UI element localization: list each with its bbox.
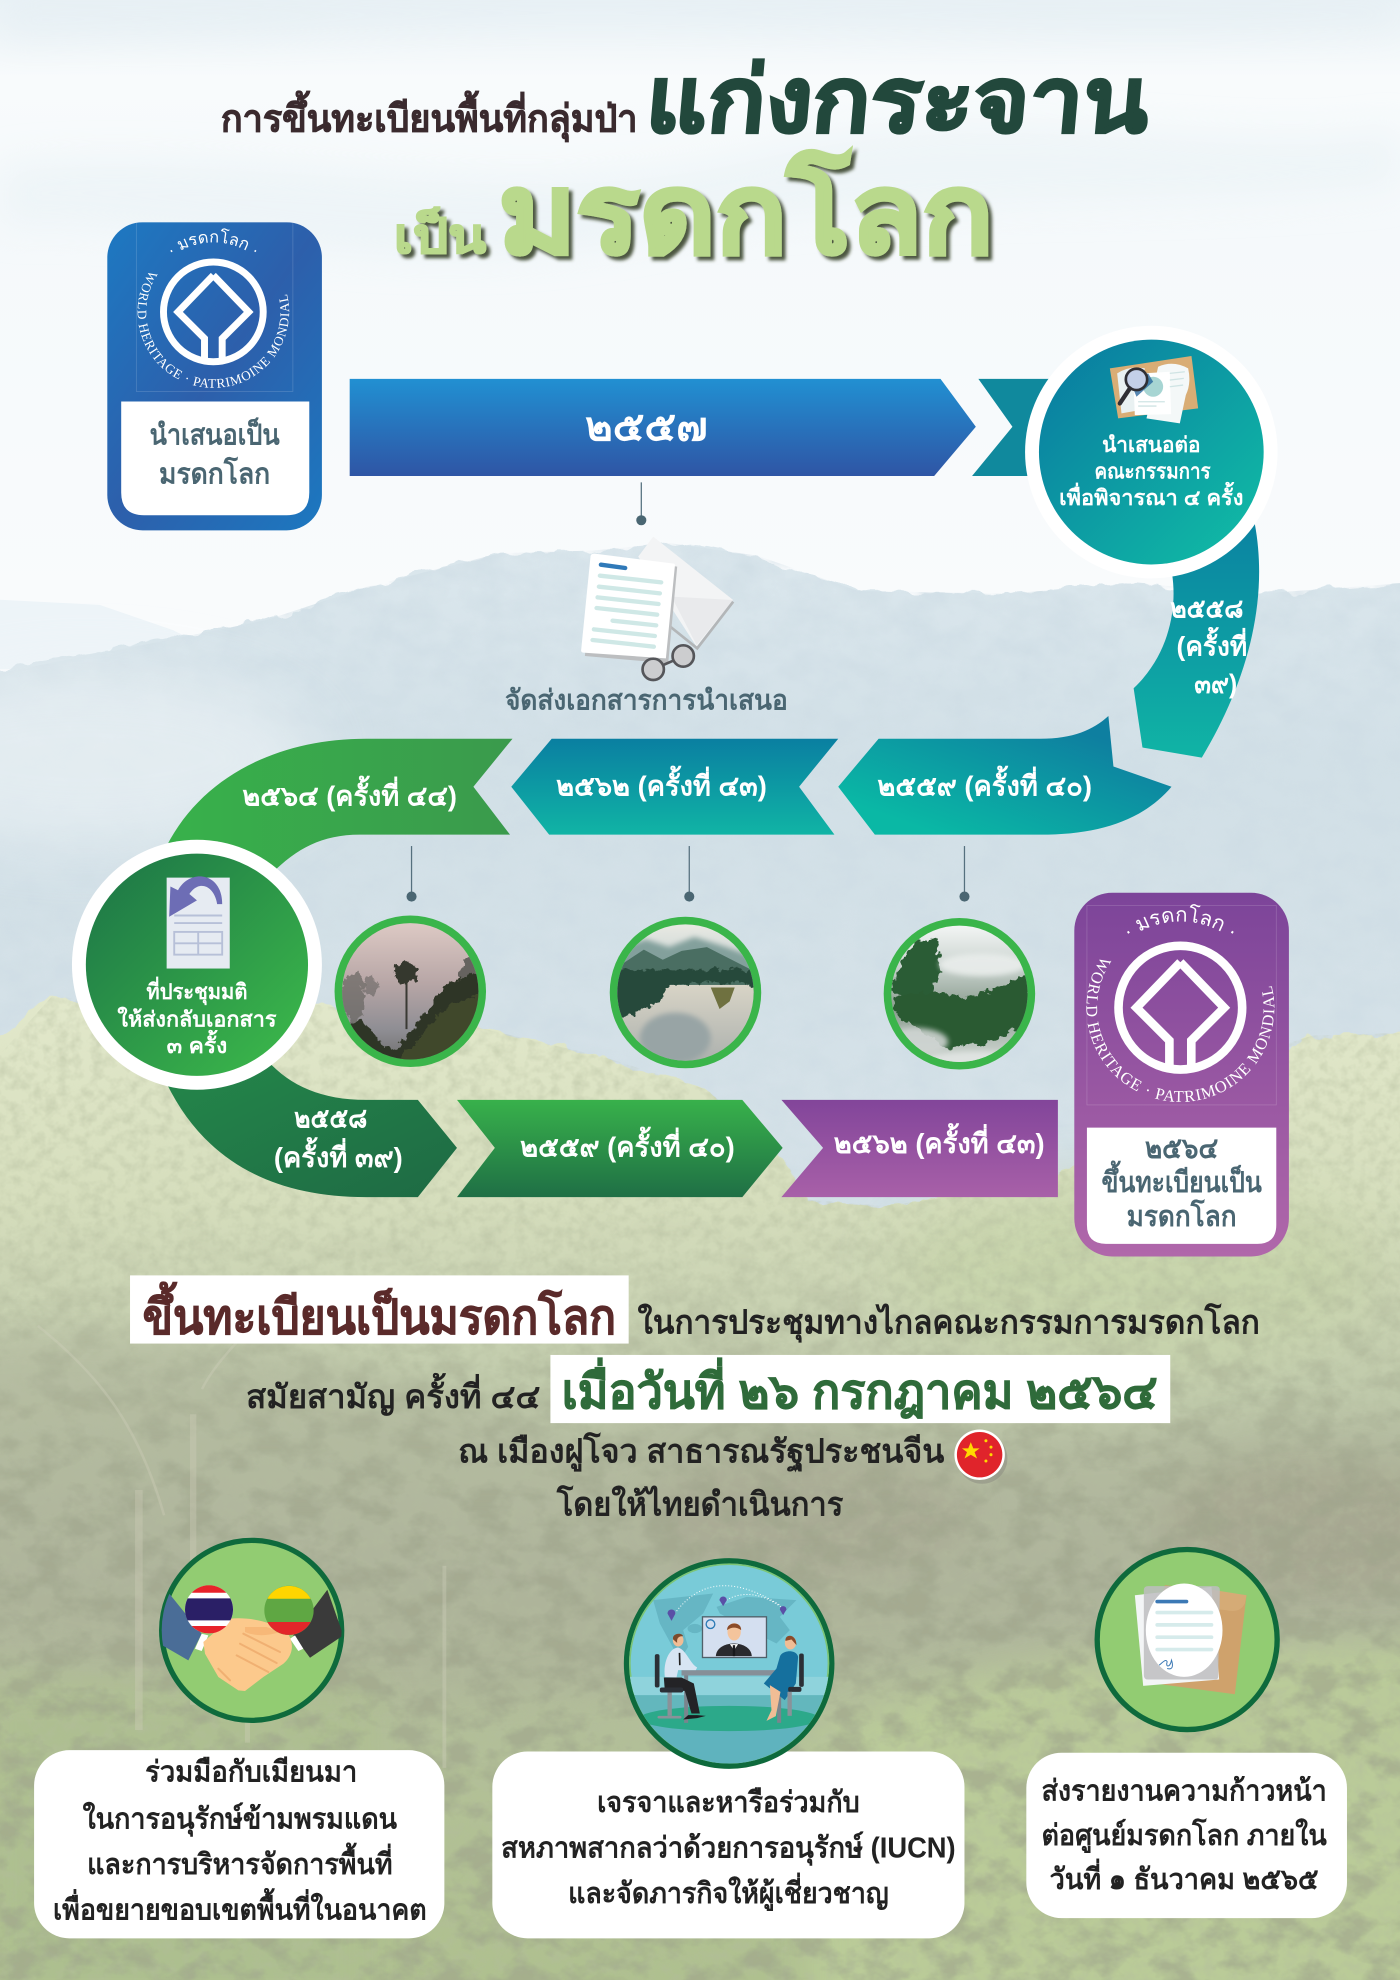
label box [121,402,309,515]
icon: handshake with Thai and Myanmar flags [157,1540,343,1720]
callout: document submission [505,482,788,716]
panel: IUCN card: สหภาพสากลว่าด้วยการอนุรักษ์ (IUCN) [501,1831,956,1866]
panel: IUCN card: และจัดภารกิจให้ผู้เชี่ยวชาญ [568,1872,889,1911]
panel: committee circle [1025,326,1278,578]
arrow: teal connector [972,379,1054,476]
panel: IUCN card: เจรจาและหารือร่วมกับ [597,1787,860,1819]
arrow: 2558 meeting 39 (dark green): ๒๕๕๘ [294,1103,367,1134]
panel: report card [1026,1753,1347,1918]
photo: forest in fog [882,918,1035,1070]
panel: returned documents circle [72,840,322,1090]
arrow: 2562 meeting 43 (purple): ๒๕๖๒ (ครั้งที่ ๔๓) [834,1123,1045,1159]
panel: cooperation card: และการบริหารจัดการพื้นที่ [87,1842,393,1881]
icon: document, envelope and glasses [581,537,733,680]
highlight: registered as world heritage: ขึ้นทะเบียนเป็นมรดกโลก [143,1281,616,1344]
arrow: 2564 meeting 44 (green) [167,739,513,874]
panel: report card: วันที่ ๑ ธันวาคม ๒๕๖๕ [1050,1858,1319,1896]
arrow: 2558 meeting 39 (dark green): (ครั้งที่ ๓๙) [274,1137,403,1173]
arrow: 2562 meeting 43 (purple) [781,1100,1058,1197]
panel: report card: ต่อศูนย์มรดกโลก ภายใน [1041,1817,1327,1853]
emblem: world heritage blue: WORLD HERITAGE · PATRIMOINE MONDIAL [138,273,290,388]
arrow: 2562 meeting 43 (teal): ๒๕๖๒ (ครั้งที่ ๔๓) [556,766,767,802]
title line 2 large: มรดกโลก [499,151,994,277]
text block: announcement: ในการประชุมทางไกลคณะกรรมการมรดกโลก [638,1302,1260,1343]
icon: China flag [954,1429,1007,1484]
title line 2 small: เป็น [394,207,486,264]
title line 1 large: แก่งกระจาน [642,50,1153,151]
icon: video meeting [627,1561,832,1766]
title line 1 small: การขึ้นทะเบียนพื้นที่กลุ่มป่า [221,90,638,142]
panel: cooperation card: ร่วมมือกับเมียนมา [145,1757,357,1789]
arrow: curved band 2558 [1134,505,1259,758]
text block: announcement: ณ เมืองฝูโจว สาธารณรัฐประชนจีน [458,1431,945,1472]
arrow: curved band 2558: ๒๕๕๘ [1170,593,1243,623]
photo: misty forest tree [335,915,492,1073]
label box [1087,1128,1276,1244]
arrow: curved band 2558: ๓๙) [1194,669,1237,699]
panel: committee circle: คณะกรรมการ [1094,460,1211,484]
label box: ขึ้นทะเบียนเป็น [1101,1160,1262,1199]
panel: purple world heritage badge [1074,892,1289,1256]
arrow: 2562 meeting 43 (teal) [511,739,838,835]
label box: ๒๕๖๔ [1145,1133,1218,1165]
arrow: 2557: ๒๕๕๗ [585,404,708,450]
arrow: 2558 meeting 39 (dark green) [167,1061,457,1197]
panel: cooperation card [34,1750,444,1938]
panel: blue world heritage badge [107,222,322,530]
label box: มรดกโลก [159,456,270,491]
label box: มรดกโลก [1127,1198,1237,1233]
arrow: 2564 meeting 44 (green): ๒๕๖๔ (ครั้งที่ ๔๔) [242,776,457,812]
icon: documents with magnifier [1110,356,1198,423]
arrow: 2557 [350,379,976,476]
panel: committee circle: นำเสนอต่อ [1102,433,1201,457]
panel: returned documents circle: ที่ประชุมมติ [146,976,247,1006]
panel: returned documents circle: ให้ส่งกลับเอกสาร [117,1006,277,1032]
panel: returned documents circle: ๓ ครั้ง [167,1029,227,1058]
panel: cooperation card: เพื่อขยายขอบเขตพื้นที่ในอนาคต [53,1887,427,1926]
arrow: 2559 meeting 40 (teal) [838,716,1172,835]
panel: committee circle: เพื่อพิจารณา ๔ ครั้ง [1059,481,1243,510]
emblem: world heritage purple: WORLD HERITAGE · PATRIMOINE MONDIAL [1086,960,1274,1102]
highlight: date: เมื่อวันที่ ๒๖ กรกฎาคม ๒๕๖๔ [562,1357,1158,1419]
title [221,50,1153,277]
panel: report card: ส่งรายงานความก้าวหน้า [1041,1776,1327,1808]
text block: announcement [130,1275,1260,1522]
panel: IUCN card [492,1751,964,1938]
emblem: world heritage purple: · มรดกโลก · [1127,904,1234,934]
arrow: 2559 meeting 40 (teal): ๒๕๕๙ (ครั้งที่ ๔๐) [877,766,1092,802]
callout: document submission: จัดส่งเอกสารการนำเสนอ [505,685,788,716]
photo: lake and mountains [610,917,761,1068]
arrow: 2559 meeting 40 (green) [457,1100,783,1197]
arrow: 2559 meeting 40 (green): ๒๕๕๙ (ครั้งที่ ๔๐) [520,1127,735,1163]
icon: returned document [167,876,230,969]
text block: announcement: โดยให้ไทยดำเนินการ [556,1484,844,1522]
panel: cooperation card: ในการอนุรักษ์ข้ามพรมแดน [83,1801,397,1836]
arrow: curved band 2558: (ครั้งที่ [1177,626,1247,661]
text block: announcement: สมัยสามัญ ครั้งที่ ๔๔ [246,1372,540,1416]
icon: report with envelope [1097,1550,1277,1730]
emblem: world heritage blue: · มรดกโลก · [170,228,256,252]
label box: นำเสนอเป็น [150,416,280,451]
connector lines to photos [406,846,970,902]
